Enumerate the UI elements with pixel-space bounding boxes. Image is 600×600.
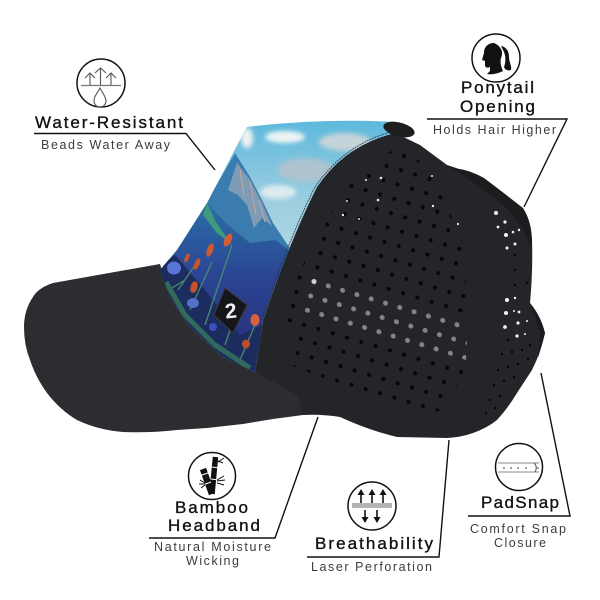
callout: ponytail opening: [427, 34, 567, 207]
leader line: [34, 134, 215, 170]
callout: bamboo headband: Headband: [168, 516, 260, 535]
callout: ponytail opening: Opening: [460, 97, 535, 116]
rock face: [228, 163, 272, 228]
brand tag: 2: [224, 299, 238, 324]
subtext: Holds Hair Higher: [433, 123, 556, 137]
callout: padsnap: [468, 373, 570, 550]
leader line: [149, 417, 318, 538]
leader line: [307, 440, 449, 557]
baseball cap photo: [24, 110, 545, 438]
cap crown mesh: [255, 133, 545, 438]
cap brim: [24, 264, 310, 432]
heading: Ponytail: [461, 78, 534, 97]
mountain: [206, 153, 290, 280]
blue valley: [160, 203, 288, 372]
icon: ponytail head: [472, 34, 520, 82]
leader line: [468, 373, 570, 516]
icon: airflow arrows: [348, 482, 396, 530]
callout: bamboo headband: Wicking: [186, 554, 239, 568]
heading: PadSnap: [481, 493, 559, 512]
subtext: Natural Moisture: [154, 540, 271, 554]
printed mountain panel: [160, 120, 394, 372]
side panel holes: [494, 211, 528, 338]
subtext: Comfort Snap: [470, 522, 566, 536]
subtext: Beads Water Away: [41, 138, 171, 152]
callout: padsnap: Closure: [494, 536, 546, 550]
meadow: [158, 255, 262, 375]
heading: Breathability: [315, 534, 434, 553]
side snap strap: [530, 303, 545, 358]
leader line: [427, 119, 567, 207]
icon: snap strap: [496, 444, 542, 490]
clouds: [241, 128, 371, 199]
callout: bamboo headband: [149, 417, 318, 568]
flowers: [166, 232, 260, 368]
seam stitching: [262, 131, 395, 320]
heading: Water-Resistant: [35, 113, 183, 132]
top button: [382, 119, 416, 140]
heading: Bamboo: [175, 498, 248, 517]
perforation holes: [280, 140, 531, 420]
icon: bamboo: [188, 452, 236, 500]
callout: breathability: [307, 440, 449, 574]
callout: water-resistant: [34, 59, 215, 170]
brand tag: [214, 288, 247, 333]
ponytail strap: [447, 165, 532, 248]
subtext: Laser Perforation: [311, 560, 432, 574]
icon: water droplet and arrows: [77, 59, 125, 107]
